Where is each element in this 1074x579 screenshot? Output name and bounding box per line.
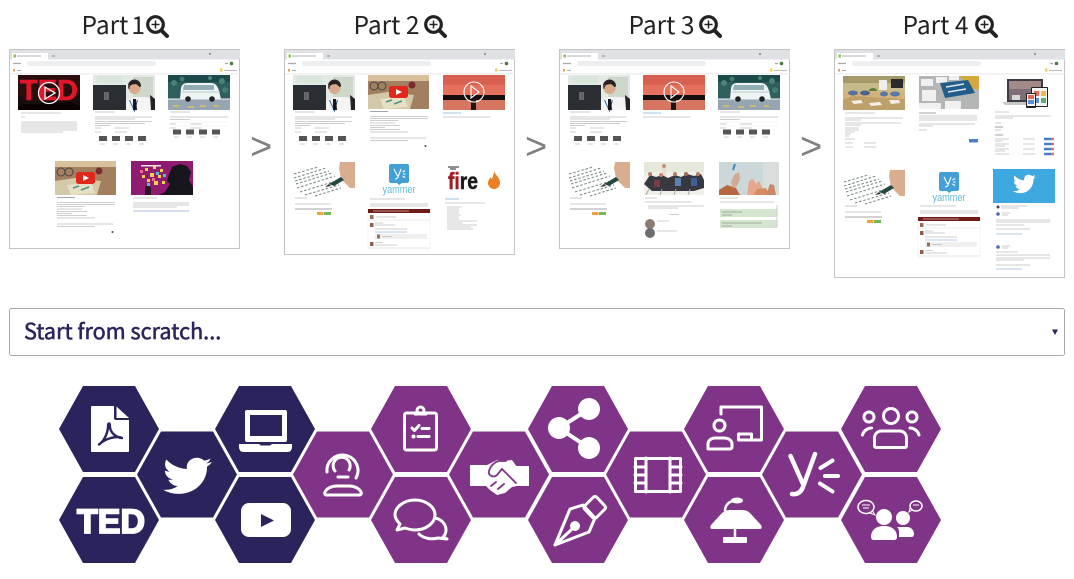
arrow: > — [525, 126, 547, 168]
YouTube tile — [368, 75, 429, 147]
panel: Part 2 screenshot — [284, 50, 515, 254]
devices tile — [995, 79, 1054, 154]
TED video tile — [18, 75, 80, 132]
social media tile — [131, 161, 193, 211]
icon: handshake hexagon — [449, 432, 549, 518]
icon: PDF hexagon — [59, 386, 159, 472]
icon: discussion hexagon — [841, 477, 941, 563]
arrow: > — [250, 126, 272, 168]
icon: webcam hexagon — [293, 432, 393, 518]
icon: conference microphone hexagon — [684, 477, 784, 563]
icon: people group hexagon — [841, 386, 941, 472]
icon: speech bubbles hexagon — [371, 477, 471, 563]
raised hands tile — [719, 162, 779, 228]
icon: presenter hexagon — [684, 386, 784, 472]
sunset video tile — [443, 75, 505, 117]
heading: Part 1: Part 1 — [82, 7, 145, 42]
heading: Part 4: Part 4 — [902, 7, 968, 42]
van tile — [168, 75, 230, 137]
helpdesk tile — [568, 75, 630, 144]
icon: Twitter hexagon — [137, 432, 237, 518]
icon: film strip hexagon — [606, 432, 706, 518]
online journal tile — [919, 76, 979, 142]
icon: laptop hexagon — [215, 386, 315, 472]
test tile — [568, 162, 630, 214]
dropdown: Start from scratch: Start from scratch... — [24, 315, 221, 346]
panel: Part 4 screenshot — [834, 50, 1065, 278]
helpdesk tile — [93, 75, 155, 144]
van tile — [718, 75, 780, 137]
meeting tile — [644, 162, 704, 238]
sunset video tile — [643, 75, 705, 117]
fire tile: fire — [448, 168, 478, 194]
icon: share hexagon — [528, 386, 628, 472]
icon: YouTube hexagon — [215, 477, 315, 563]
icon: TED hexagon: TED — [77, 503, 145, 541]
YouTube tile — [55, 161, 116, 233]
Yammer tile — [918, 172, 980, 257]
meeting room tile — [843, 76, 905, 147]
panel: Part 1 screenshot — [10, 50, 240, 248]
dropdown: Start from scratch — [10, 308, 1064, 356]
heading: Part 3: Part 3 — [628, 7, 694, 42]
icon: clipboard hexagon — [371, 386, 471, 472]
icon: TED hexagon — [59, 477, 159, 563]
heading: Part 2: Part 2 — [354, 7, 419, 42]
Yammer tile — [368, 164, 430, 249]
icon: Yammer hexagon — [762, 432, 862, 518]
fire tile — [445, 167, 500, 229]
test tile — [293, 162, 355, 214]
arrow: > — [800, 126, 822, 168]
icon: fountain pen hexagon — [528, 477, 628, 563]
helpdesk tile — [293, 75, 355, 144]
test tile — [843, 170, 905, 222]
Twitter tile — [993, 169, 1055, 269]
panel: Part 3 screenshot — [560, 50, 790, 248]
